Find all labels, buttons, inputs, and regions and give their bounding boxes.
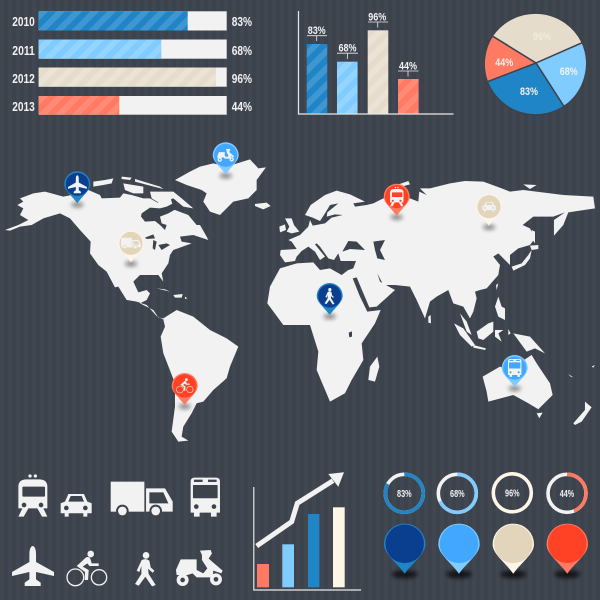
bar row 2012: 2012 [12,72,35,86]
panel: column chart [298,11,454,114]
pin: car [476,194,502,230]
ring 44% [548,474,586,512]
column 96%: 96% [368,12,386,24]
column 83%: 83% [308,25,326,37]
ring 44%: 44% [560,489,574,500]
large pin: red [547,524,588,578]
ring 96%: 96% [505,488,520,500]
panel: pie chart: 96% [533,31,551,43]
column 68% [337,42,358,114]
bar row 2012: 96% [232,72,252,86]
bar row 2012 [12,68,252,87]
pin: scooter [213,142,239,178]
large pin: beige [493,524,534,578]
panel: horizontal progress bars [12,11,252,115]
panel: pie chart [484,13,587,115]
icon: bicycle [67,551,107,586]
growth chart with arrow [254,472,361,590]
pin: bicycle [172,373,198,409]
column 83% [307,25,327,114]
Black Sea and Caspian [342,240,385,260]
arrow [257,472,344,546]
African lake [349,331,352,337]
ring 83%: 83% [397,489,412,500]
Eurasia, Africa and Oceania [267,181,595,425]
pin: pedestrian [317,283,343,319]
icon: truck [111,482,173,517]
progress rings [385,474,586,512]
icon: car [61,494,92,517]
icon: plane [12,546,54,586]
column 96% [368,12,388,114]
ring 68% [438,474,476,512]
icon: train [18,474,47,517]
ring 96% [493,474,531,512]
column 68%: 68% [338,42,357,54]
European islands [279,181,410,233]
transport icon set [12,474,223,586]
ring 68%: 68% [450,489,465,500]
bar row 2011: 2011 [12,44,35,58]
bar row 2010 [12,11,252,31]
pin: truck [118,230,144,266]
large pin: dark blue [384,524,425,578]
world map [5,159,595,442]
icon: scooter [176,550,223,586]
bar row 2011: 68% [232,44,252,58]
column 44% [398,60,419,114]
Americas and Greenland [5,159,271,442]
panel: pie chart: 44% [495,57,513,69]
bar row 2010: 83% [232,15,252,29]
Asian islands [454,184,545,353]
bar row 2013: 2013 [12,100,35,114]
panel: pie chart: 68% [560,66,578,78]
pin: bus [502,355,528,391]
bar row 2010: 2010 [12,15,35,29]
ring 83% [385,474,423,512]
pin: plane [64,171,90,207]
icon: bus [191,478,220,517]
icon: pedestrian [135,552,156,586]
large pin: light blue [438,524,480,578]
column 44%: 44% [399,60,417,72]
bar row 2013: 44% [232,100,252,114]
bar row 2013 [12,96,252,115]
Hudson Bay and Great Lakes [141,202,177,250]
pin: train [384,184,410,220]
panel: pie chart: 83% [520,86,538,98]
bar row 2011 [12,40,252,59]
